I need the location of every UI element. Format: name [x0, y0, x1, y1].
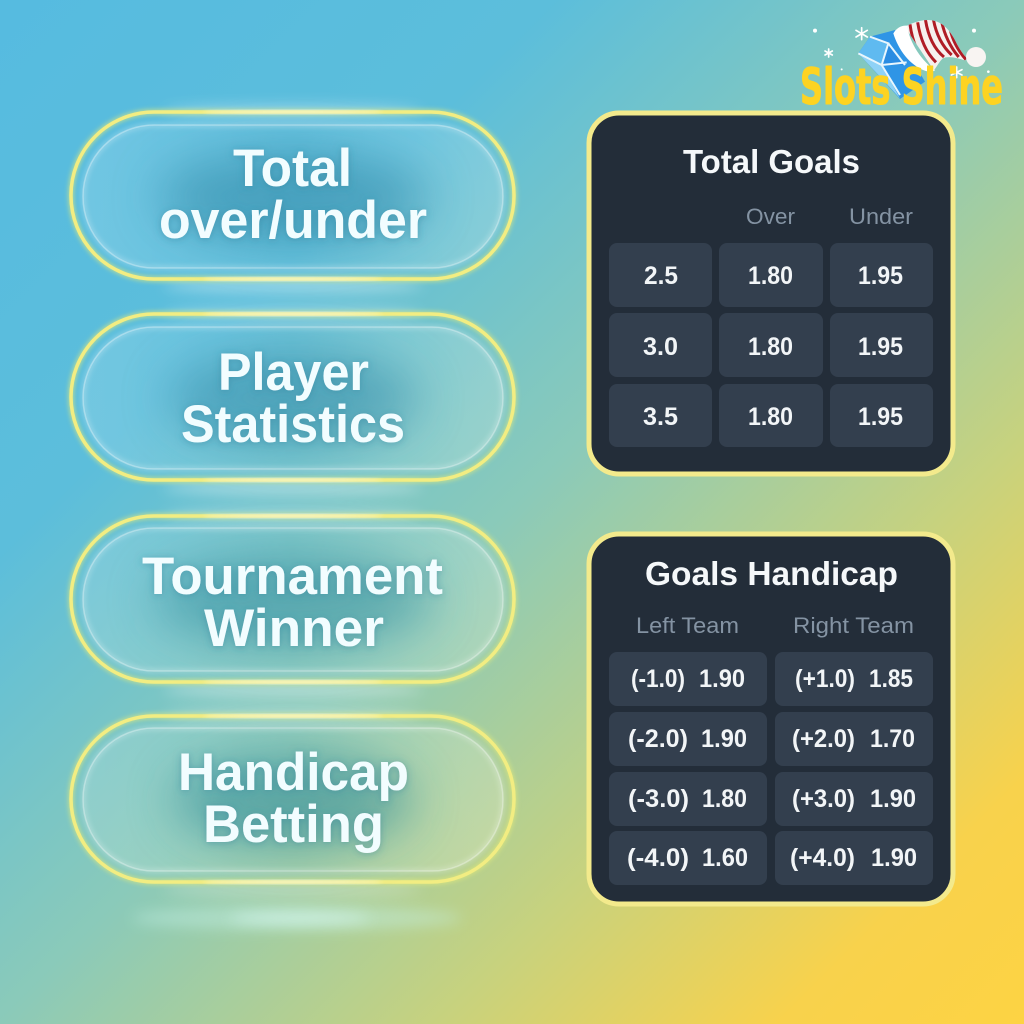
row: handicap 2.0: (+2.0) [792, 725, 855, 753]
panel: Goals Handicap [589, 534, 953, 904]
row: handicap 1.0: (-1.0) [631, 665, 685, 693]
row: handicap 4.0 [609, 831, 933, 885]
row: handicap 3.0: 1.90 [870, 785, 916, 813]
pill: Total over/under [71, 106, 514, 293]
pill: Total over/under: over/under [159, 191, 427, 250]
pill: Tournament Winner: Tournament [142, 547, 443, 606]
pill: Player Statistics: Player [218, 343, 369, 402]
row: 3.0 [609, 313, 933, 377]
row: handicap 2.0: 1.90 [701, 725, 747, 753]
row: handicap 4.0: (+4.0) [790, 844, 855, 872]
row: handicap 4.0: 1.60 [702, 844, 748, 872]
row: handicap 1.0 [609, 652, 933, 706]
panel: Total Goals [589, 113, 953, 474]
row: 3.5: 1.95 [858, 403, 903, 431]
row: handicap 4.0: (-4.0) [627, 844, 689, 872]
icon: blue diamond [858, 30, 925, 99]
icon: santa hat [893, 19, 986, 72]
pill: Handicap Betting [71, 710, 514, 896]
pill: Handicap Betting: Betting [203, 795, 384, 854]
column headers: Left Team, Right Team: Right Team [793, 613, 914, 638]
row: handicap 2.0: 1.70 [870, 725, 915, 753]
icon: snowflakes [813, 28, 990, 78]
row: 2.5 [609, 243, 933, 307]
row: 2.5: 1.80 [748, 262, 793, 290]
logo: Slots Shine [802, 20, 1002, 105]
pill: Player Statistics: Statistics [181, 395, 405, 454]
row: handicap 3.0: 1.80 [702, 785, 747, 813]
row: handicap 3.0: (+3.0) [792, 785, 855, 813]
pill: Tournament Winner: Winner [204, 599, 384, 658]
column headers: Over, Under: Under [849, 204, 913, 229]
pill: Tournament Winner [71, 510, 514, 697]
row: handicap 1.0: 1.85 [869, 665, 913, 693]
row: handicap 4.0: 1.90 [871, 844, 917, 872]
row: 3.5 [609, 384, 933, 447]
column headers: Over, Under [746, 204, 913, 229]
row: handicap 2.0 [609, 712, 933, 766]
column headers: Over, Under: Over [746, 204, 795, 229]
row: 3.0: 1.80 [748, 333, 793, 361]
pill: Player Statistics [71, 308, 514, 495]
heading: Goals Handicap: Goals Handicap [645, 555, 898, 592]
row: 3.0: 3.0 [643, 333, 678, 361]
row: 2.5: 2.5 [644, 262, 678, 290]
heading: Total Goals: Total Goals [683, 143, 860, 180]
row: 3.5: 3.5 [643, 403, 678, 431]
pill: Total over/under: Total [233, 139, 352, 198]
row: 3.0: 1.95 [858, 333, 903, 361]
row: 2.5: 1.95 [858, 262, 903, 290]
row: handicap 1.0: 1.90 [699, 665, 745, 693]
row: handicap 3.0 [609, 772, 933, 826]
floor glow [132, 906, 462, 930]
pill: Handicap Betting: Handicap [178, 743, 409, 802]
row: handicap 3.0: (-3.0) [628, 785, 689, 813]
row: 3.5: 1.80 [748, 403, 793, 431]
column headers: Left Team, Right Team [636, 613, 914, 638]
column headers: Left Team, Right Team: Left Team [636, 613, 739, 638]
row: handicap 1.0: (+1.0) [795, 665, 855, 693]
row: handicap 2.0: (-2.0) [628, 725, 688, 753]
